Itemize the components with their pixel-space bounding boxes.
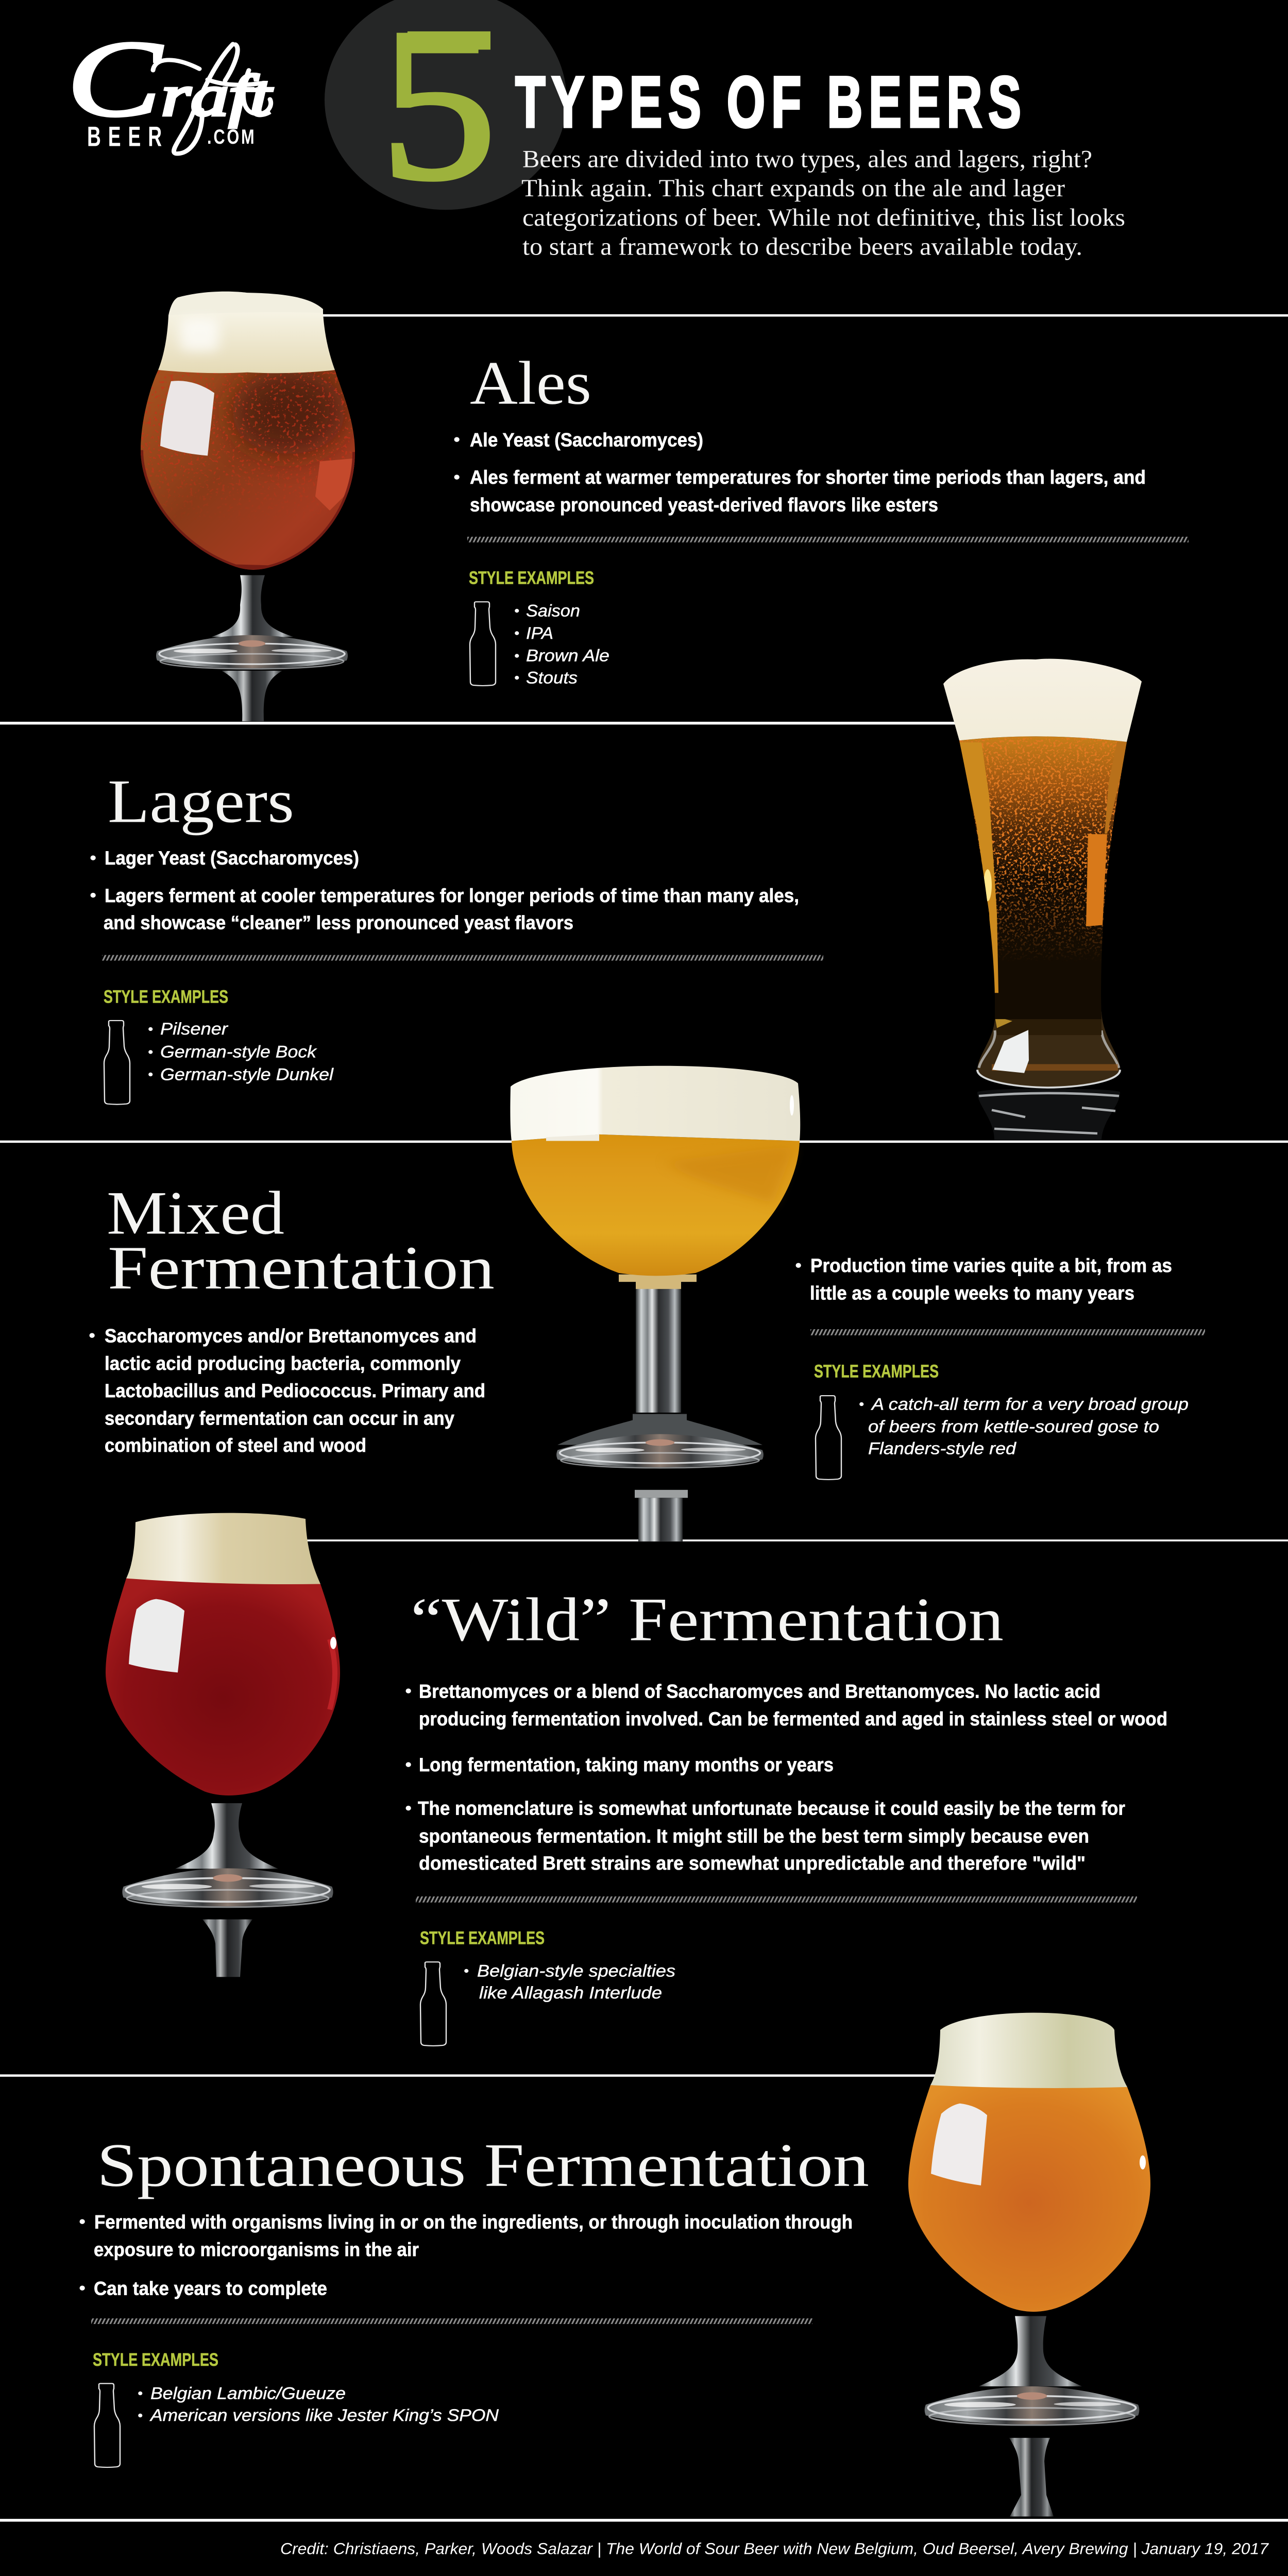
bullets: wild: domesticated Brett strains are somewhat unpredictable and therefore "wild" [419,1852,1086,1874]
bullets: ales: Ale Yeast (Saccharomyces) [470,429,703,451]
bullets: lagers [90,848,799,934]
style list: lagers: German-style Dunkel [160,1064,334,1084]
style list: mixed: of beers from kettle-soured gose to [868,1417,1159,1436]
title badge circle [325,0,567,210]
bullets: mixed left: secondary fermentation can occur in any [105,1408,454,1429]
heading: mixed fermentation: Fermentation [108,1233,495,1302]
style list: ales: Saison [526,601,580,620]
style list: lagers: • [148,1067,154,1082]
style list: ales: • [514,648,520,664]
bullets: mixed right: little as a couple weeks to many years [810,1282,1134,1304]
bullets: wild: spontaneous fermentation. It might still be the best term simply because even [419,1825,1089,1847]
glass: ale tulip [139,292,361,721]
style list: ales: • [514,670,520,686]
logo: CraftBeer.com: Craft [67,19,273,139]
style list: spontaneous: • [138,2386,143,2401]
style list: wild: • [464,1963,469,1979]
bullets: mixed right: Production time varies quite a bit, from as [810,1255,1172,1276]
bullets: mixed left: combination of steel and wood [105,1435,366,1456]
panel: wild fermentation [405,1585,1167,2046]
heading: lagers: Lagers [108,767,294,836]
glass: wild fermentation tulip [106,1513,340,1977]
bullets: mixed left: Saccharomyces and/or Brettanomyces and [105,1325,477,1347]
bullets: lagers: Lager Yeast (Saccharomyces) [105,848,359,869]
icon: bottle [94,2383,120,2467]
bullets: ales: • [453,467,460,487]
style examples: wild: STYLE EXAMPLES [420,1928,545,1948]
intro paragraph [521,146,1125,260]
style list: lagers: Pilsener [160,1019,229,1038]
style list: mixed: A catch-all term for a very broad group [871,1394,1189,1414]
bullets: wild [405,1681,1167,1874]
bullets: mixed left: Lactobacillus and Pediococcus. Primary and [105,1380,485,1401]
bullets: spontaneous: exposure to microorganisms in the air [94,2239,419,2260]
bullets: mixed left [89,1325,485,1456]
bullets: mixed left: • [89,1326,95,1346]
style list: ales: Brown Ale [526,646,609,665]
logo: CraftBeer.com: .COM [207,126,255,148]
highlight [129,1599,184,1672]
panel: spontaneous fermentation [79,2130,869,2467]
panel: mixed fermentation [89,1178,1205,1480]
bullets: mixed right [795,1255,1172,1304]
style list: mixed: • [859,1397,865,1412]
bullets: lagers: • [90,848,96,868]
bullets: spontaneous [79,2211,853,2299]
heading: wild fermentation: “Wild” Fermentation [411,1585,1004,1654]
style list: wild: Belgian-style specialties [477,1961,675,1980]
style list: lagers: German-style Bock [160,1042,317,1061]
bullets: wild: • [405,1755,412,1775]
highlight [992,1030,1029,1073]
heading: mixed fermentation: Mixed [107,1178,284,1247]
glass: mixed fermentation coupe [510,1066,800,1541]
style list: ales: Stouts [526,668,578,687]
intro paragraph: Think again. This chart expands on the ale and lager [521,175,1065,202]
bullets: ales: Ales ferment at warmer temperatures for shorter time periods than lagers, and [470,466,1146,488]
style list: lagers: • [148,1022,154,1037]
style list: wild [464,1961,675,2002]
style list: ales: IPA [526,623,553,642]
intro paragraph: to start a framework to describe beers available today. [522,233,1082,260]
heading: ales: Ales [470,348,591,417]
bullets: lagers: Lagers ferment at cooler temperatures for longer periods of time than many ales, [105,885,799,906]
style list: ales [514,601,609,687]
logo: CraftBeer.com: BEER [87,121,162,152]
bullets: mixed left: lactic acid producing bacteria, commonly [105,1352,461,1374]
bullets: spontaneous: • [79,2279,86,2298]
style list: wild: like Allagash Interlude [479,1983,662,2002]
style list: spontaneous: American versions like Jester King’s SPON [149,2405,499,2425]
bullets: spontaneous: Fermented with organisms living in or on the ingredients, or through inoculation through [94,2211,853,2233]
icon: bottle [816,1396,841,1480]
style list: mixed: Flanders-style red [868,1439,1016,1458]
bullets: lagers: and showcase “cleaner” less pronounced yeast flavors [104,912,573,934]
icon: bottle [470,602,496,686]
bullets: spontaneous: Can take years to complete [94,2278,327,2299]
style list: ales: • [514,603,520,619]
style examples: spontaneous: STYLE EXAMPLES [93,2350,218,2370]
bullets: ales: • [453,430,460,450]
style list: spontaneous [138,2383,499,2425]
bullets: wild: • [405,1682,412,1701]
style list: lagers [148,1019,334,1084]
intro paragraph: categorizations of beer. While not definitive, this list looks [522,204,1125,231]
glass: lager pilsner [943,659,1142,1140]
style list: spontaneous: • [138,2408,143,2424]
bullets: wild: Brettanomyces or a blend of Saccharomyces and Brettanomyces. No lactic acid [419,1681,1100,1702]
bullets: spontaneous: • [79,2212,86,2232]
heading: mixed fermentation [107,1178,495,1302]
icon: bottle [420,1962,446,2046]
style list: lagers: • [148,1044,154,1060]
panel: ales [453,348,1189,687]
icon: bottle [104,1021,130,1105]
bullets: lagers: • [90,886,96,905]
bullets: mixed right: • [795,1256,802,1275]
style examples: ales: STYLE EXAMPLES [469,568,594,588]
style list: mixed [859,1394,1189,1458]
highlight [931,2104,987,2185]
style list: ales: • [514,626,520,641]
panel: lagers [90,767,823,1105]
style examples: mixed: STYLE EXAMPLES [814,1362,939,1382]
highlight [160,381,214,456]
bullets: wild: producing fermentation involved. Can be fermented and aged in stainless steel or wood [419,1708,1167,1730]
bullets: wild: The nomenclature is somewhat unfortunate because it could easily be the term for [418,1798,1125,1819]
heading: spontaneous fermentation: Spontaneous Fermentation [97,2130,869,2199]
bullets: wild: • [405,1799,412,1818]
style examples: lagers: STYLE EXAMPLES [104,987,228,1007]
style list: spontaneous: Belgian Lambic/Gueuze [150,2383,346,2403]
intro paragraph: Beers are divided into two types, ales and lagers, right? [522,146,1092,173]
bullets: ales [453,429,1146,516]
bullets: wild: Long fermentation, taking many months or years [419,1754,834,1775]
title: TYPES OF BEERS [515,61,1021,142]
bullets: ales: showcase pronounced yeast-derived flavors like esters [470,494,938,516]
glass: spontaneous fermentation tulip [908,2013,1150,2517]
